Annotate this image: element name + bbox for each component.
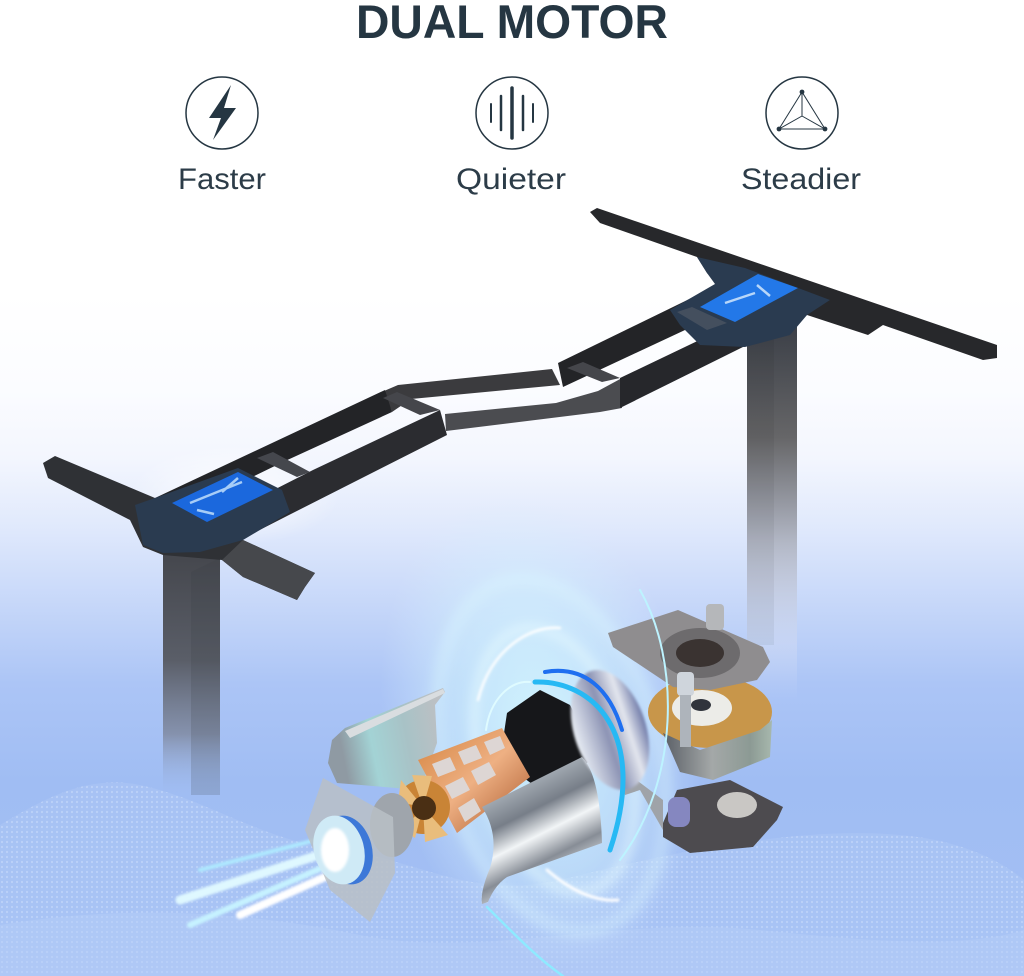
left crossbar bbox=[43, 456, 315, 600]
left crossbar flange bbox=[222, 540, 315, 600]
left motor window bbox=[172, 472, 273, 522]
left motor plate tint bbox=[135, 468, 290, 553]
right motor window bbox=[700, 274, 798, 322]
label: steadier: Steadier bbox=[741, 163, 861, 196]
energy glow bbox=[338, 463, 742, 976]
shaft pin bbox=[677, 672, 694, 747]
icon: tetrahedron bbox=[766, 77, 838, 149]
desk frame bbox=[43, 208, 997, 795]
center disc bbox=[557, 660, 663, 800]
dotted wave backdrop bbox=[0, 782, 1024, 976]
front magnet bbox=[482, 757, 602, 904]
top plate bbox=[608, 604, 770, 690]
right rails bbox=[558, 268, 807, 408]
label: quieter: Quieter bbox=[456, 163, 566, 196]
light beams bbox=[180, 835, 345, 925]
black rotor end bbox=[500, 690, 597, 790]
lower gearbox bbox=[663, 780, 783, 853]
icon: lightning bolt bbox=[186, 77, 258, 149]
gear housing bbox=[648, 676, 772, 780]
label: faster: Faster bbox=[178, 163, 266, 196]
commutator bbox=[396, 775, 450, 842]
icon: sound wave bbox=[476, 77, 548, 149]
mount plate bbox=[305, 778, 395, 922]
right crossbar bbox=[590, 208, 997, 360]
bearing sleeve bbox=[370, 793, 414, 857]
left leg bbox=[163, 550, 220, 795]
left rails bbox=[155, 390, 447, 540]
soft halo behind left frame end bbox=[130, 445, 340, 545]
feature: quieter bbox=[456, 77, 566, 196]
feature: faster bbox=[178, 77, 266, 196]
right cross plate bbox=[677, 307, 727, 330]
concentric glow rings bbox=[401, 553, 703, 957]
rear magnet edge bbox=[345, 689, 445, 738]
energy rings bbox=[478, 590, 668, 976]
center connector bbox=[610, 760, 663, 830]
center connector bars bbox=[384, 369, 622, 431]
electric motor exploded view bbox=[180, 590, 783, 976]
right motor plate tint bbox=[670, 257, 830, 347]
lens assembly bbox=[306, 810, 380, 890]
right leg bbox=[747, 325, 797, 700]
back magnet bbox=[328, 688, 445, 790]
rotor windings bbox=[418, 728, 530, 833]
feature: steadier bbox=[741, 77, 861, 196]
